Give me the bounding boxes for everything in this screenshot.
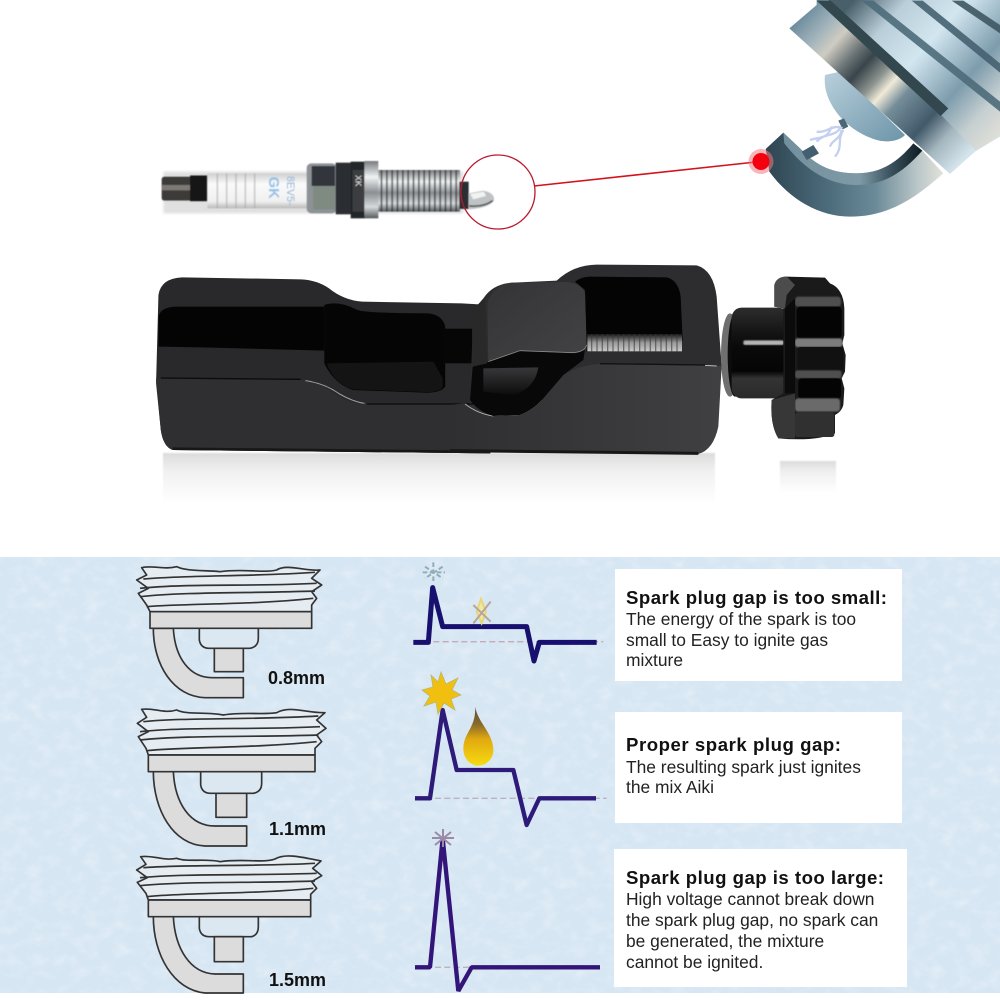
terminal nut <box>162 175 208 201</box>
gap tool reflection <box>163 453 836 503</box>
red pointer dot <box>748 149 774 174</box>
insulator dome <box>825 72 905 141</box>
threaded shank <box>378 170 460 212</box>
ceramic insulator: 8EV5- <box>284 176 296 206</box>
description: High voltage cannot break down <box>626 889 874 909</box>
text box: gap too large <box>614 849 907 987</box>
pointer line <box>534 162 756 186</box>
description: the mix Aiki <box>626 777 714 797</box>
waveform large gap <box>415 838 600 991</box>
electrode close-up illustration <box>766 0 1000 217</box>
left slot <box>158 307 324 351</box>
heading: Spark plug gap is too small: <box>626 587 887 608</box>
waveform proper gap <box>415 707 607 825</box>
panel: spark gap comparison <box>0 557 1000 993</box>
tool left section <box>156 277 490 453</box>
screw threads <box>587 334 682 351</box>
gap label 0.8mm: 0.8mm <box>268 668 325 688</box>
heading: Spark plug gap is too large: <box>626 867 884 888</box>
icon: faint spark <box>423 562 445 582</box>
gap label 1.1mm: 1.1mm <box>269 819 326 839</box>
spark plug gap tool <box>156 265 846 454</box>
description: be generated, the mixture <box>626 931 824 951</box>
text box: gap too small <box>615 569 902 681</box>
right pocket <box>575 277 683 352</box>
under anvil recess <box>470 350 585 416</box>
shaft <box>721 308 788 398</box>
icon: small purple spark <box>432 829 454 847</box>
knob and shaft <box>721 277 846 439</box>
spark plug photo <box>162 161 494 218</box>
description: small to Easy to ignite gas <box>626 630 828 650</box>
tool right section <box>450 265 722 454</box>
description: mixture <box>626 650 683 670</box>
ceramic insulator <box>207 173 307 208</box>
icon: flame <box>463 707 493 766</box>
description: the spark plug gap, no spark can <box>626 910 878 930</box>
plug profile 1.1mm <box>137 709 326 846</box>
hex nut: XK <box>353 175 363 187</box>
sliding anvil <box>487 282 587 362</box>
description: The energy of the spark is too <box>626 609 856 629</box>
electric spark <box>810 127 843 157</box>
plug shell <box>789 0 1000 174</box>
hex nut <box>307 161 378 218</box>
ground electrode <box>766 118 943 217</box>
description: cannot be ignited. <box>626 952 763 972</box>
gap label 1.5mm: 1.5mm <box>269 970 326 990</box>
icon: crossed spark <box>473 599 491 623</box>
description: The resulting spark just ignites <box>626 757 861 777</box>
heading: Proper spark plug gap: <box>626 734 841 755</box>
ceramic insulator: GK <box>265 177 281 199</box>
plug profile 0.8mm <box>137 567 322 698</box>
thumb knob <box>771 277 846 439</box>
middle pocket <box>324 303 445 393</box>
plug profile 1.5mm <box>137 856 322 993</box>
waveform small gap <box>413 562 603 661</box>
electrode tip <box>459 182 494 209</box>
anvil side <box>472 298 487 367</box>
magnifier circle <box>461 155 535 229</box>
text box: proper gap <box>615 712 902 823</box>
icon: yellow spark <box>422 672 461 714</box>
